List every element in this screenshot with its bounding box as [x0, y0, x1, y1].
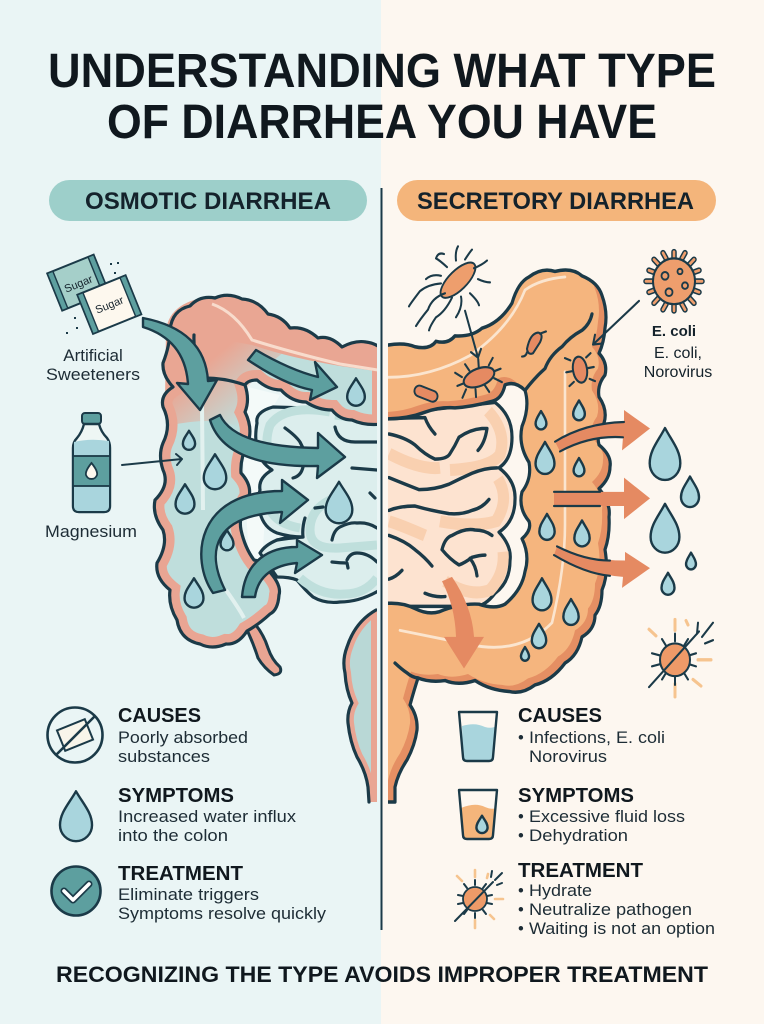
list: osmotic treatment	[52, 863, 327, 923]
icon: sugar packets: Sugar	[63, 273, 95, 296]
arrow: colon lower	[201, 480, 308, 593]
list: osmotic treatment: Symptoms resolve quickly	[118, 905, 327, 923]
list: osmotic symptoms: SYMPTOMS	[118, 785, 234, 807]
appendix: osmotic	[247, 624, 281, 675]
title: UNDERSTANDING WHAT TYPE	[48, 45, 716, 98]
list: osmotic treatment: TREATMENT	[118, 863, 243, 885]
icon: virus	[646, 252, 702, 311]
list: secretory treatment	[455, 860, 715, 938]
icon: neutralized pathogen	[649, 619, 713, 697]
list: secretory symptoms: •	[518, 808, 524, 826]
rectum: osmotic	[344, 608, 377, 802]
water drops: outside colon	[650, 428, 699, 595]
list: secretory treatment: Hydrate	[529, 882, 592, 900]
arrow: fluid out lower	[554, 546, 650, 588]
heading: osmotic diarrhea	[49, 180, 367, 221]
icon: glass with orange fluid	[459, 790, 497, 839]
colon: osmotic	[154, 295, 382, 647]
list: osmotic symptoms: into the colon	[118, 827, 228, 845]
list: secretory treatment: •	[518, 901, 524, 919]
arrow: fluid out middle	[554, 478, 650, 519]
arrow: downward	[442, 577, 484, 669]
colon top band	[244, 324, 372, 370]
list: osmotic causes: CAUSES	[118, 705, 201, 727]
arrow: bacterium to colon	[465, 311, 481, 358]
list: secretory treatment: •	[518, 882, 524, 900]
heading: secretory diarrhea: SECRETORY DIARRHEA	[417, 188, 694, 215]
water drops: secretory colon	[521, 400, 590, 661]
icon: glass of water	[459, 712, 497, 761]
heading: osmotic diarrhea: OSMOTIC DIARRHEA	[85, 188, 331, 215]
arrow: sugar into colon	[143, 318, 217, 410]
list: osmotic causes: Poorly absorbed	[118, 729, 248, 747]
list: secretory symptoms: Dehydration	[529, 827, 628, 845]
label: magnesium: Magnesium	[45, 522, 137, 541]
colon top wash	[165, 296, 282, 424]
list: secretory causes: •	[518, 729, 524, 747]
list: osmotic causes: substances	[118, 748, 210, 766]
icon: check mark	[52, 866, 100, 916]
footer message: RECOGNIZING THE TYPE AVOIDS IMPROPER TREATMENT	[56, 962, 709, 987]
list: secretory treatment: •	[518, 920, 524, 938]
label: e. coli: Norovirus	[644, 364, 712, 381]
list: secretory symptoms: •	[518, 827, 524, 845]
arrow: colon middle	[210, 415, 345, 478]
list: secretory causes: Norovirus	[529, 748, 607, 766]
list: secretory treatment: TREATMENT	[518, 860, 643, 882]
illustration: osmotic intestine	[143, 295, 382, 802]
list: secretory symptoms	[459, 785, 685, 845]
arrow: colon upper	[248, 350, 337, 400]
list: osmotic treatment: Eliminate triggers	[118, 886, 259, 904]
arrow: magnesium to colon	[122, 454, 182, 465]
heading: secretory diarrhea	[397, 180, 716, 221]
icon: sugar packets: Sugar	[94, 294, 126, 317]
colon highlight	[388, 277, 565, 647]
icon: crossed packet	[48, 708, 102, 762]
list: osmotic symptoms: Increased water influx	[118, 808, 297, 826]
label: e. coli	[644, 323, 712, 381]
icon: bacterium	[409, 246, 490, 330]
icons and markers: secretory side	[409, 246, 713, 697]
background: right panel	[381, 0, 764, 1024]
water drops: osmotic colon	[176, 378, 365, 608]
title	[48, 45, 716, 149]
list: osmotic symptoms	[60, 785, 297, 845]
icon: magnesium bottle	[73, 413, 110, 512]
icon: sugar packets	[47, 255, 141, 334]
label: artificial sweeteners: Sweeteners	[46, 365, 140, 384]
list: secretory causes: CAUSES	[518, 705, 602, 727]
divider	[380, 188, 382, 930]
icon: neutralized virus	[455, 870, 503, 928]
title: OF DIARRHEA YOU HAVE	[107, 96, 657, 149]
small intestine: secretory	[380, 402, 515, 606]
label: artificial sweeteners: Artificial	[63, 346, 123, 365]
colon mucosa highlight	[212, 304, 378, 370]
arrow: virus to colon	[593, 301, 639, 345]
label: e. coli: E. coli,	[654, 345, 702, 362]
list: secretory causes	[459, 705, 665, 766]
list: secretory treatment: Waiting is not an option	[529, 920, 715, 938]
arrow: fluid out upper	[555, 410, 650, 451]
list: osmotic causes	[48, 705, 248, 766]
icon: water drop	[60, 791, 92, 841]
arrow: colon bottom	[242, 540, 322, 597]
background: left panel	[0, 0, 381, 1024]
list: secretory causes: Infections, E. coli	[529, 729, 665, 747]
list: secretory symptoms: SYMPTOMS	[518, 785, 634, 807]
illustration: secretory intestine	[373, 263, 650, 802]
label: artificial sweeteners	[46, 346, 140, 384]
small intestine: osmotic	[240, 385, 380, 602]
label: e. coli: E. coli	[652, 323, 696, 340]
list: secretory treatment: Neutralize pathogen	[529, 901, 692, 919]
colon: secretory	[373, 263, 610, 802]
bacteria inside colon	[413, 331, 596, 403]
list: secretory symptoms: Excessive fluid loss	[529, 808, 685, 826]
